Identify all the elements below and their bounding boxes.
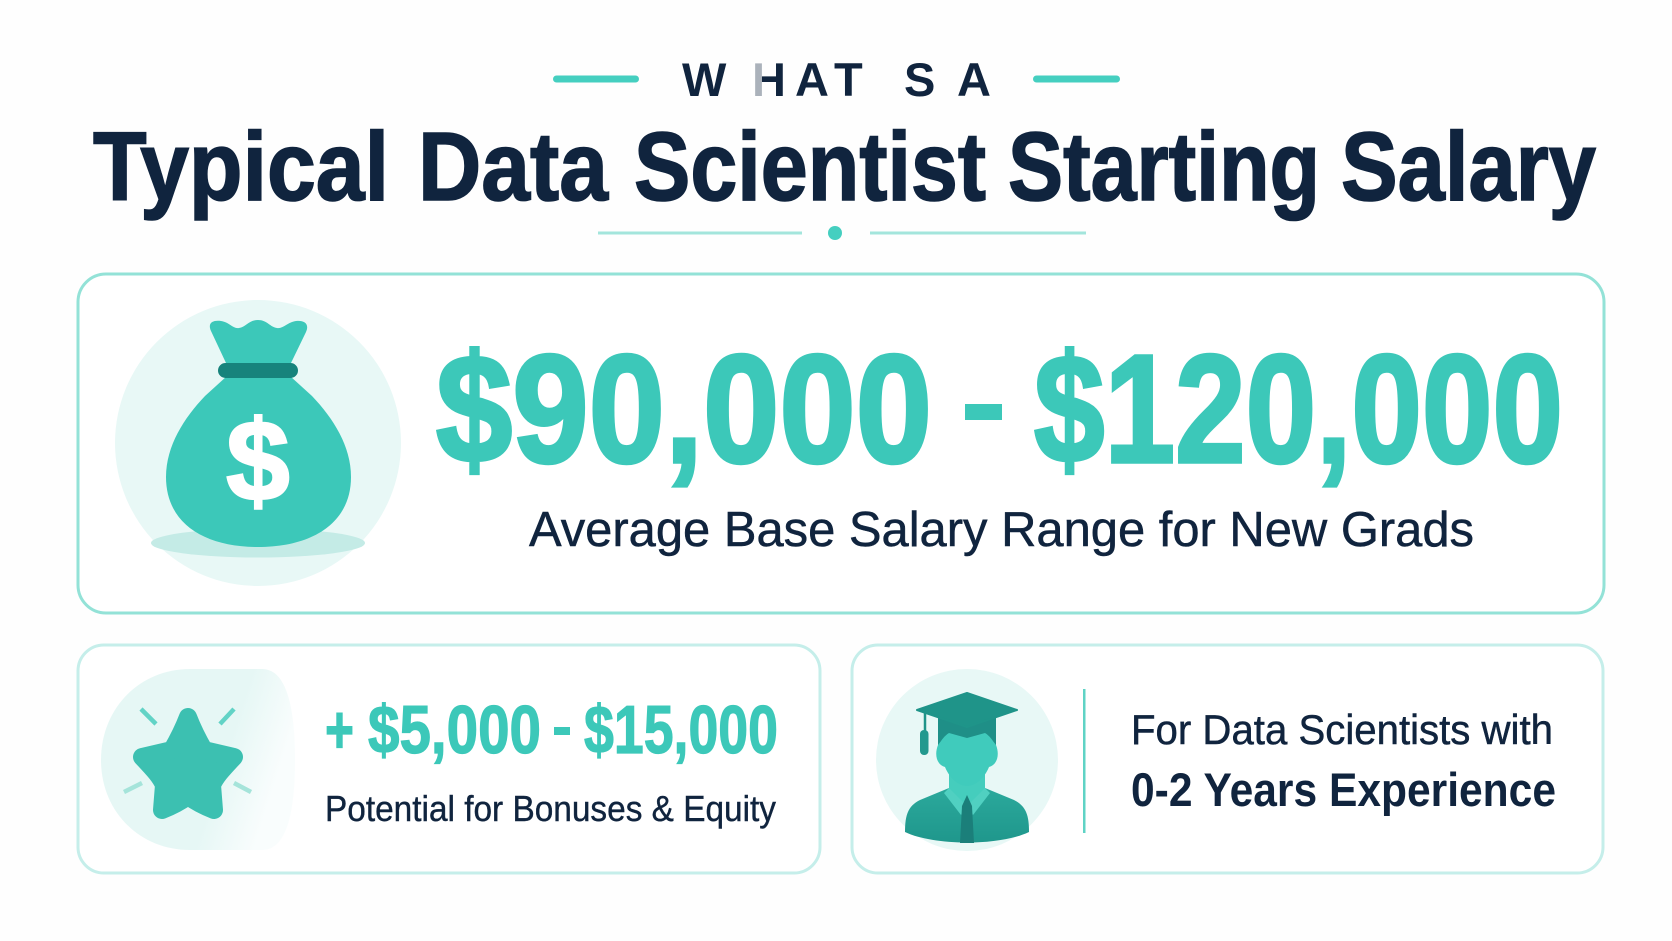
title: Data	[418, 112, 609, 221]
salary range figure: $90,000	[436, 323, 932, 495]
bonus amount: +	[325, 692, 354, 768]
salary range figure	[436, 323, 1563, 495]
bonus amount: $5,000	[368, 692, 541, 768]
title: Scientist	[634, 112, 986, 221]
icon: graduate	[876, 669, 1058, 851]
experience line two: 0-2 Years Experience	[1131, 763, 1556, 816]
bonus amount	[325, 692, 778, 768]
icon: money bag: $	[226, 398, 290, 525]
salary range caption: Average Base Salary Range for New Grads	[529, 503, 1474, 557]
header: eyebrow text with bars: WHATSA	[682, 53, 991, 106]
title: Starting	[1008, 112, 1320, 221]
bonus caption: Potential for Bonuses & Equity	[325, 788, 776, 829]
icon: star with sparkles	[101, 669, 295, 850]
title: Salary	[1341, 112, 1596, 221]
experience line one: For Data Scientists with	[1131, 706, 1553, 753]
panel: base salary	[78, 274, 1604, 613]
panel: experience	[852, 645, 1603, 873]
header: eyebrow text with bars	[553, 53, 1120, 106]
title divider	[598, 226, 1086, 240]
bonus amount: $15,000	[584, 692, 778, 768]
title	[93, 112, 1596, 221]
panel: bonuses and equity	[78, 645, 820, 873]
divider line	[1083, 689, 1086, 833]
icon: money bag	[115, 300, 401, 586]
title: Typical	[93, 112, 389, 221]
salary range figure: $120,000	[1034, 323, 1563, 495]
